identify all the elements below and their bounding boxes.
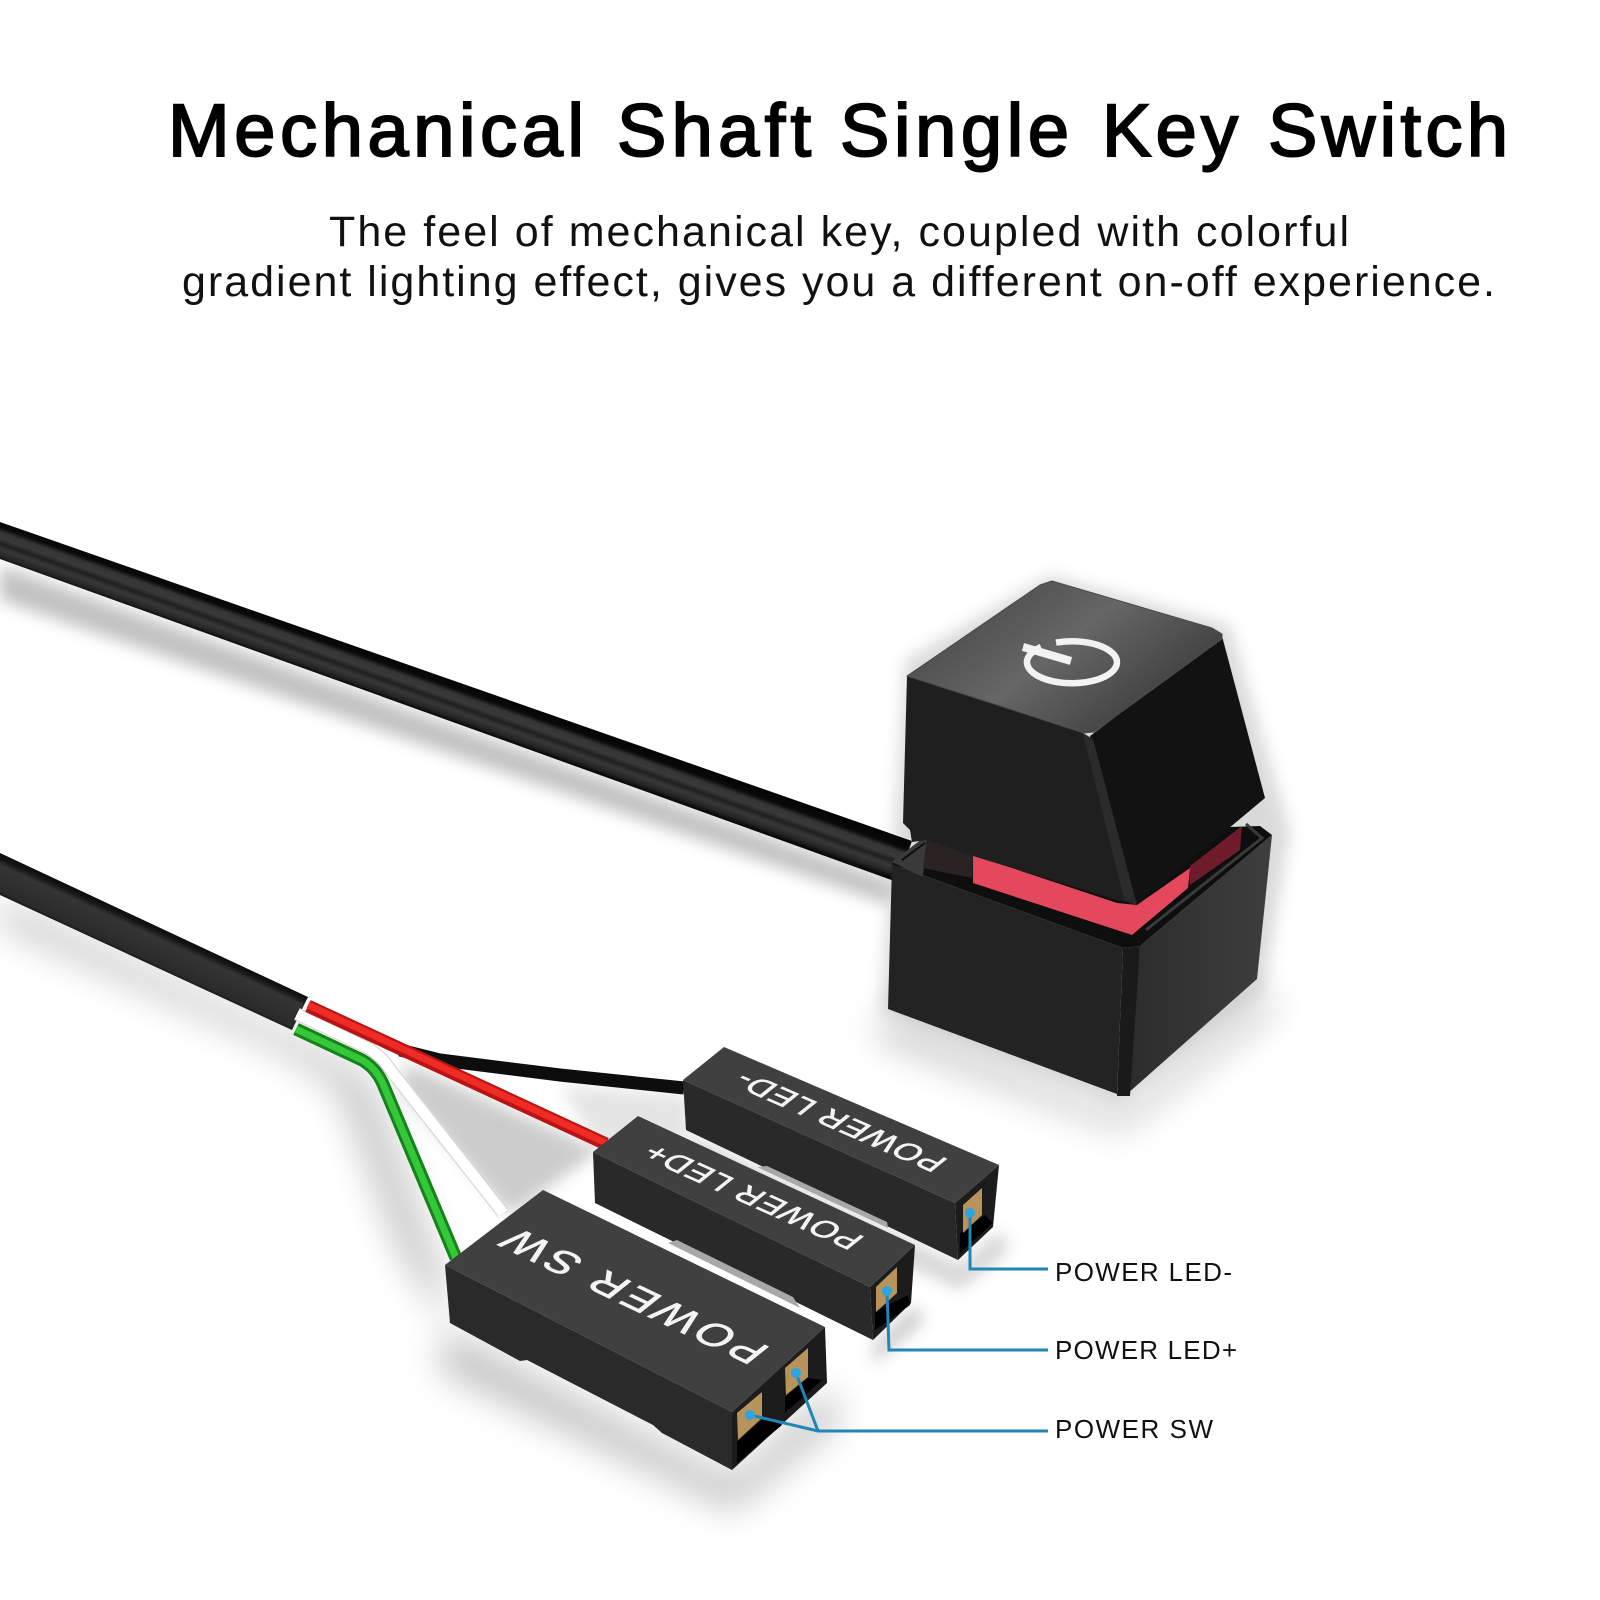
subtitle: gradient lighting effect, gives you a different on-off experience. [182, 258, 1495, 306]
light band: bright red [973, 855, 1190, 935]
title: Switch [1268, 89, 1508, 172]
wire: white [297, 1014, 503, 1213]
title: Shaft [617, 89, 811, 172]
key switch [888, 581, 1272, 1096]
connector: power led plus: POWER LED+ [635, 1139, 871, 1255]
title: Key [1102, 89, 1238, 172]
connector: power sw: POWER SW [490, 1222, 778, 1371]
title [168, 89, 1508, 172]
title: Single [840, 89, 1069, 172]
connector: power led minus: POWER LED- [725, 1067, 954, 1177]
connector notch highlight: upper [757, 1166, 888, 1228]
label: power led plus: POWER LED+ [1055, 1335, 1237, 1365]
keycap left face [903, 676, 1137, 905]
light band: dim left [923, 837, 973, 878]
label: power led minus: POWER LED- [1055, 1257, 1232, 1287]
subtitle [182, 208, 1495, 306]
connector: power sw [445, 1190, 827, 1470]
wire: green [296, 1029, 456, 1258]
icon: power symbol [1023, 641, 1117, 683]
callout lines [750, 1213, 1048, 1431]
wire: red [308, 1005, 606, 1144]
light band: dark red right [1190, 826, 1242, 885]
soft shadows [0, 565, 1290, 1510]
connector: power led plus [593, 1116, 915, 1340]
connector: power led minus [683, 1047, 999, 1260]
keycap right face [1090, 636, 1265, 905]
label: power sw: POWER SW [1055, 1414, 1213, 1444]
keycap top face [907, 581, 1222, 733]
callout dots [745, 1208, 975, 1420]
connector notch highlight: lower [668, 1240, 800, 1308]
lower cable [0, 853, 308, 1030]
keycap corner bevel [1083, 733, 1137, 905]
title: Mechanical [168, 89, 584, 172]
wire: black [400, 1050, 684, 1088]
subtitle: The feel of mechanical key, coupled with colorful [329, 208, 1349, 256]
switch base housing [888, 824, 1272, 1096]
upper flat cable [0, 522, 912, 882]
